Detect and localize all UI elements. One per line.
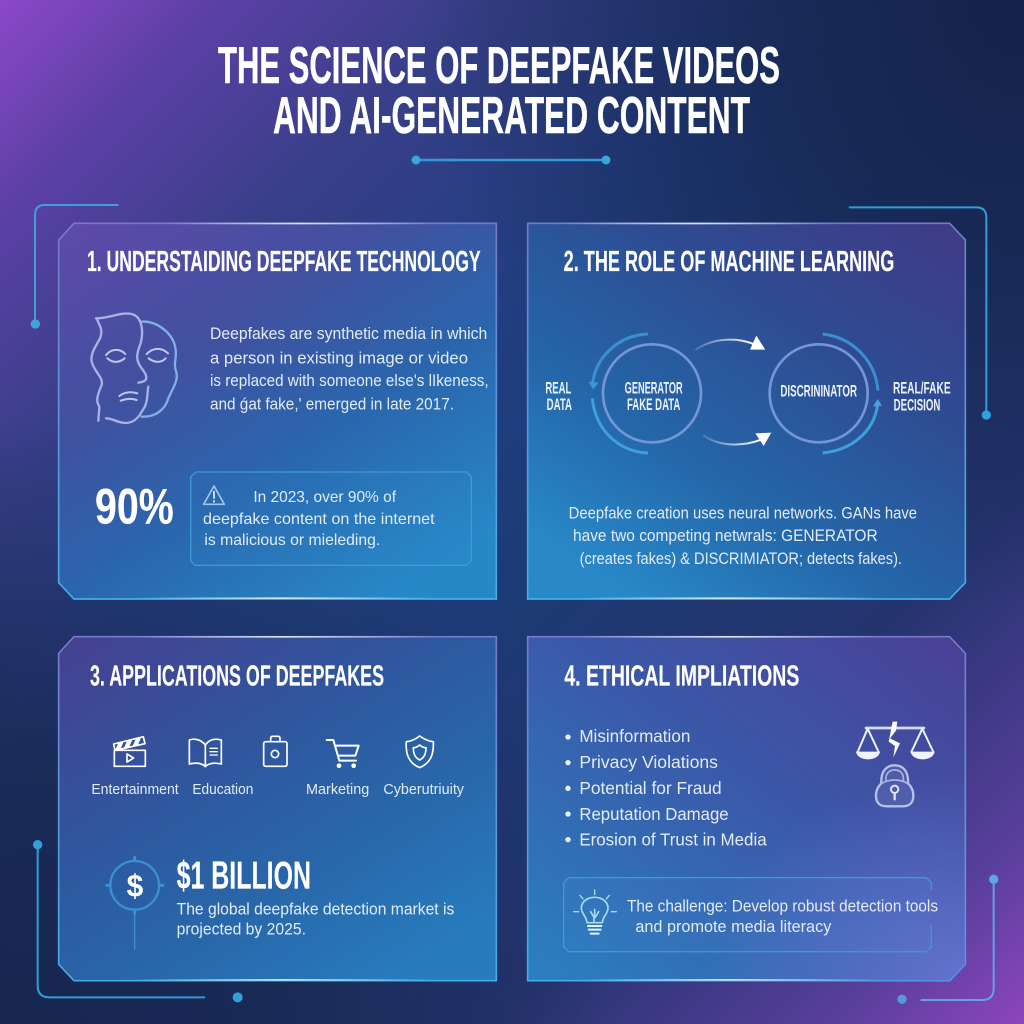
- label: generator: FAKE DATA: [627, 395, 680, 414]
- panel: ethical implications: [528, 636, 965, 981]
- body text: [210, 325, 489, 413]
- icon: light bulb: [574, 890, 616, 934]
- body text: Deepfake creation uses neural networks. GANs have: [569, 504, 917, 522]
- title divider: [412, 156, 610, 164]
- generator outer arcs: [588, 334, 648, 453]
- panel 3 background: [59, 637, 496, 981]
- label: real data: DATA: [547, 395, 572, 414]
- label: decision: DECISION: [894, 395, 940, 414]
- icon labels: Marketing: [306, 782, 369, 798]
- label: real data: REAL: [545, 378, 571, 397]
- statistic description: [177, 900, 454, 938]
- body text: have two competing netwrals: GENERATOR: [573, 527, 878, 545]
- corner connector: top right: [850, 207, 991, 420]
- label: discriminator: DISCRININATOR: [780, 382, 857, 401]
- bullet list: Misinformation: [579, 726, 690, 746]
- bullet list: Reputation Damage: [579, 804, 729, 824]
- label: real data: [545, 378, 572, 414]
- corner connector: bottom right: [897, 875, 998, 1004]
- panel 1 heading: 1. UNDERSTAIDING DEEPFAKE TECHNOLOGY: [87, 246, 481, 278]
- icon: padlock: [876, 765, 913, 806]
- callout text: The challenge: Develop robust detection tools: [627, 897, 938, 915]
- statistic: $1 billion: $1 BILLION: [177, 854, 311, 897]
- discriminator outer arcs: [823, 334, 882, 453]
- icon: dollar target: [107, 857, 163, 950]
- callout box: [564, 878, 931, 952]
- generator circle: [603, 344, 701, 442]
- panel 4 background: [528, 637, 965, 981]
- title: [218, 37, 780, 145]
- panel: applications of deepfakes: [59, 636, 496, 981]
- callout text: and promote media literacy: [635, 918, 832, 936]
- panel 2 edge glow: [562, 223, 879, 599]
- icon: shopping cart: [327, 740, 359, 768]
- icon: shield: [406, 736, 433, 768]
- body text: is replaced with someone else's lIkeness,: [210, 372, 489, 390]
- label: decision: REAL/FAKE: [893, 379, 951, 398]
- icon labels: Education: [192, 782, 253, 798]
- icon: broken scales: [856, 722, 935, 759]
- body text: Deepfakes are synthetic media in which: [210, 325, 487, 343]
- bullet list: Privacy Violations: [579, 752, 718, 772]
- icon: open book: [189, 739, 221, 767]
- panel 2 background: [528, 223, 965, 599]
- statistic description: projected by 2025.: [177, 920, 306, 938]
- callout text: [203, 489, 435, 549]
- label: generator: [625, 378, 683, 414]
- body text: a person in existing image or video: [210, 349, 468, 367]
- arrow: generator to discriminator: [695, 336, 765, 350]
- corner connector: bottom left: [33, 840, 243, 1002]
- body text: and ǵat fake,' emerged in late 2017.: [210, 395, 454, 413]
- body text: [569, 504, 917, 568]
- panel 4 corner tint: [528, 637, 965, 981]
- panel 3 edge glow: [133, 636, 433, 981]
- callout text: [627, 897, 938, 936]
- icon labels: Cyberutriuity: [383, 782, 465, 798]
- icon: badge bag: [264, 736, 287, 766]
- label: generator: GENERATOR: [625, 378, 683, 397]
- panel: understanding deepfake technology: [59, 223, 496, 599]
- callout text: deepfake content on the internet: [203, 511, 435, 528]
- panel 4 edge glow: [579, 636, 879, 981]
- icon: two overlapping faces: [91, 314, 177, 423]
- bullet list: Potential for Fraud: [579, 778, 722, 798]
- panel 1 background: [59, 223, 496, 599]
- callout text: In 2023, over 90% of: [253, 489, 397, 506]
- panel: the role of machine learning: [528, 223, 965, 599]
- panel 3 heading: 3. APPLICATIONS OF DEEPFAKES: [90, 661, 384, 693]
- statistic description: The global deepfake detection market is: [177, 900, 454, 918]
- callout box: [191, 472, 471, 565]
- icon: dollar target: $: [127, 869, 143, 904]
- callout text: is malicious or mieleding.: [204, 532, 380, 549]
- corner connector: top left: [31, 205, 118, 329]
- GAN diagram: [545, 334, 951, 453]
- icon labels: [91, 782, 465, 798]
- body text: (creates fakes) & DISCRIMIATOR; detects fakes).: [580, 550, 902, 568]
- statistic: 90%: 90%: [95, 478, 174, 534]
- icon: clapperboard: [114, 737, 145, 766]
- bullet list: [565, 726, 767, 849]
- arrow: discriminator to generator: [703, 433, 771, 446]
- bullet list: Erosion of Trust in Media: [579, 829, 767, 849]
- icon labels: Entertainment: [91, 782, 179, 798]
- panel 1 edge glow: [133, 223, 433, 599]
- icon: warning triangle: [204, 486, 224, 504]
- discriminator circle: [770, 344, 868, 442]
- panel 4 heading: 4. ETHICAL IMPLIATIONS: [564, 661, 799, 693]
- label: decision: [893, 379, 951, 414]
